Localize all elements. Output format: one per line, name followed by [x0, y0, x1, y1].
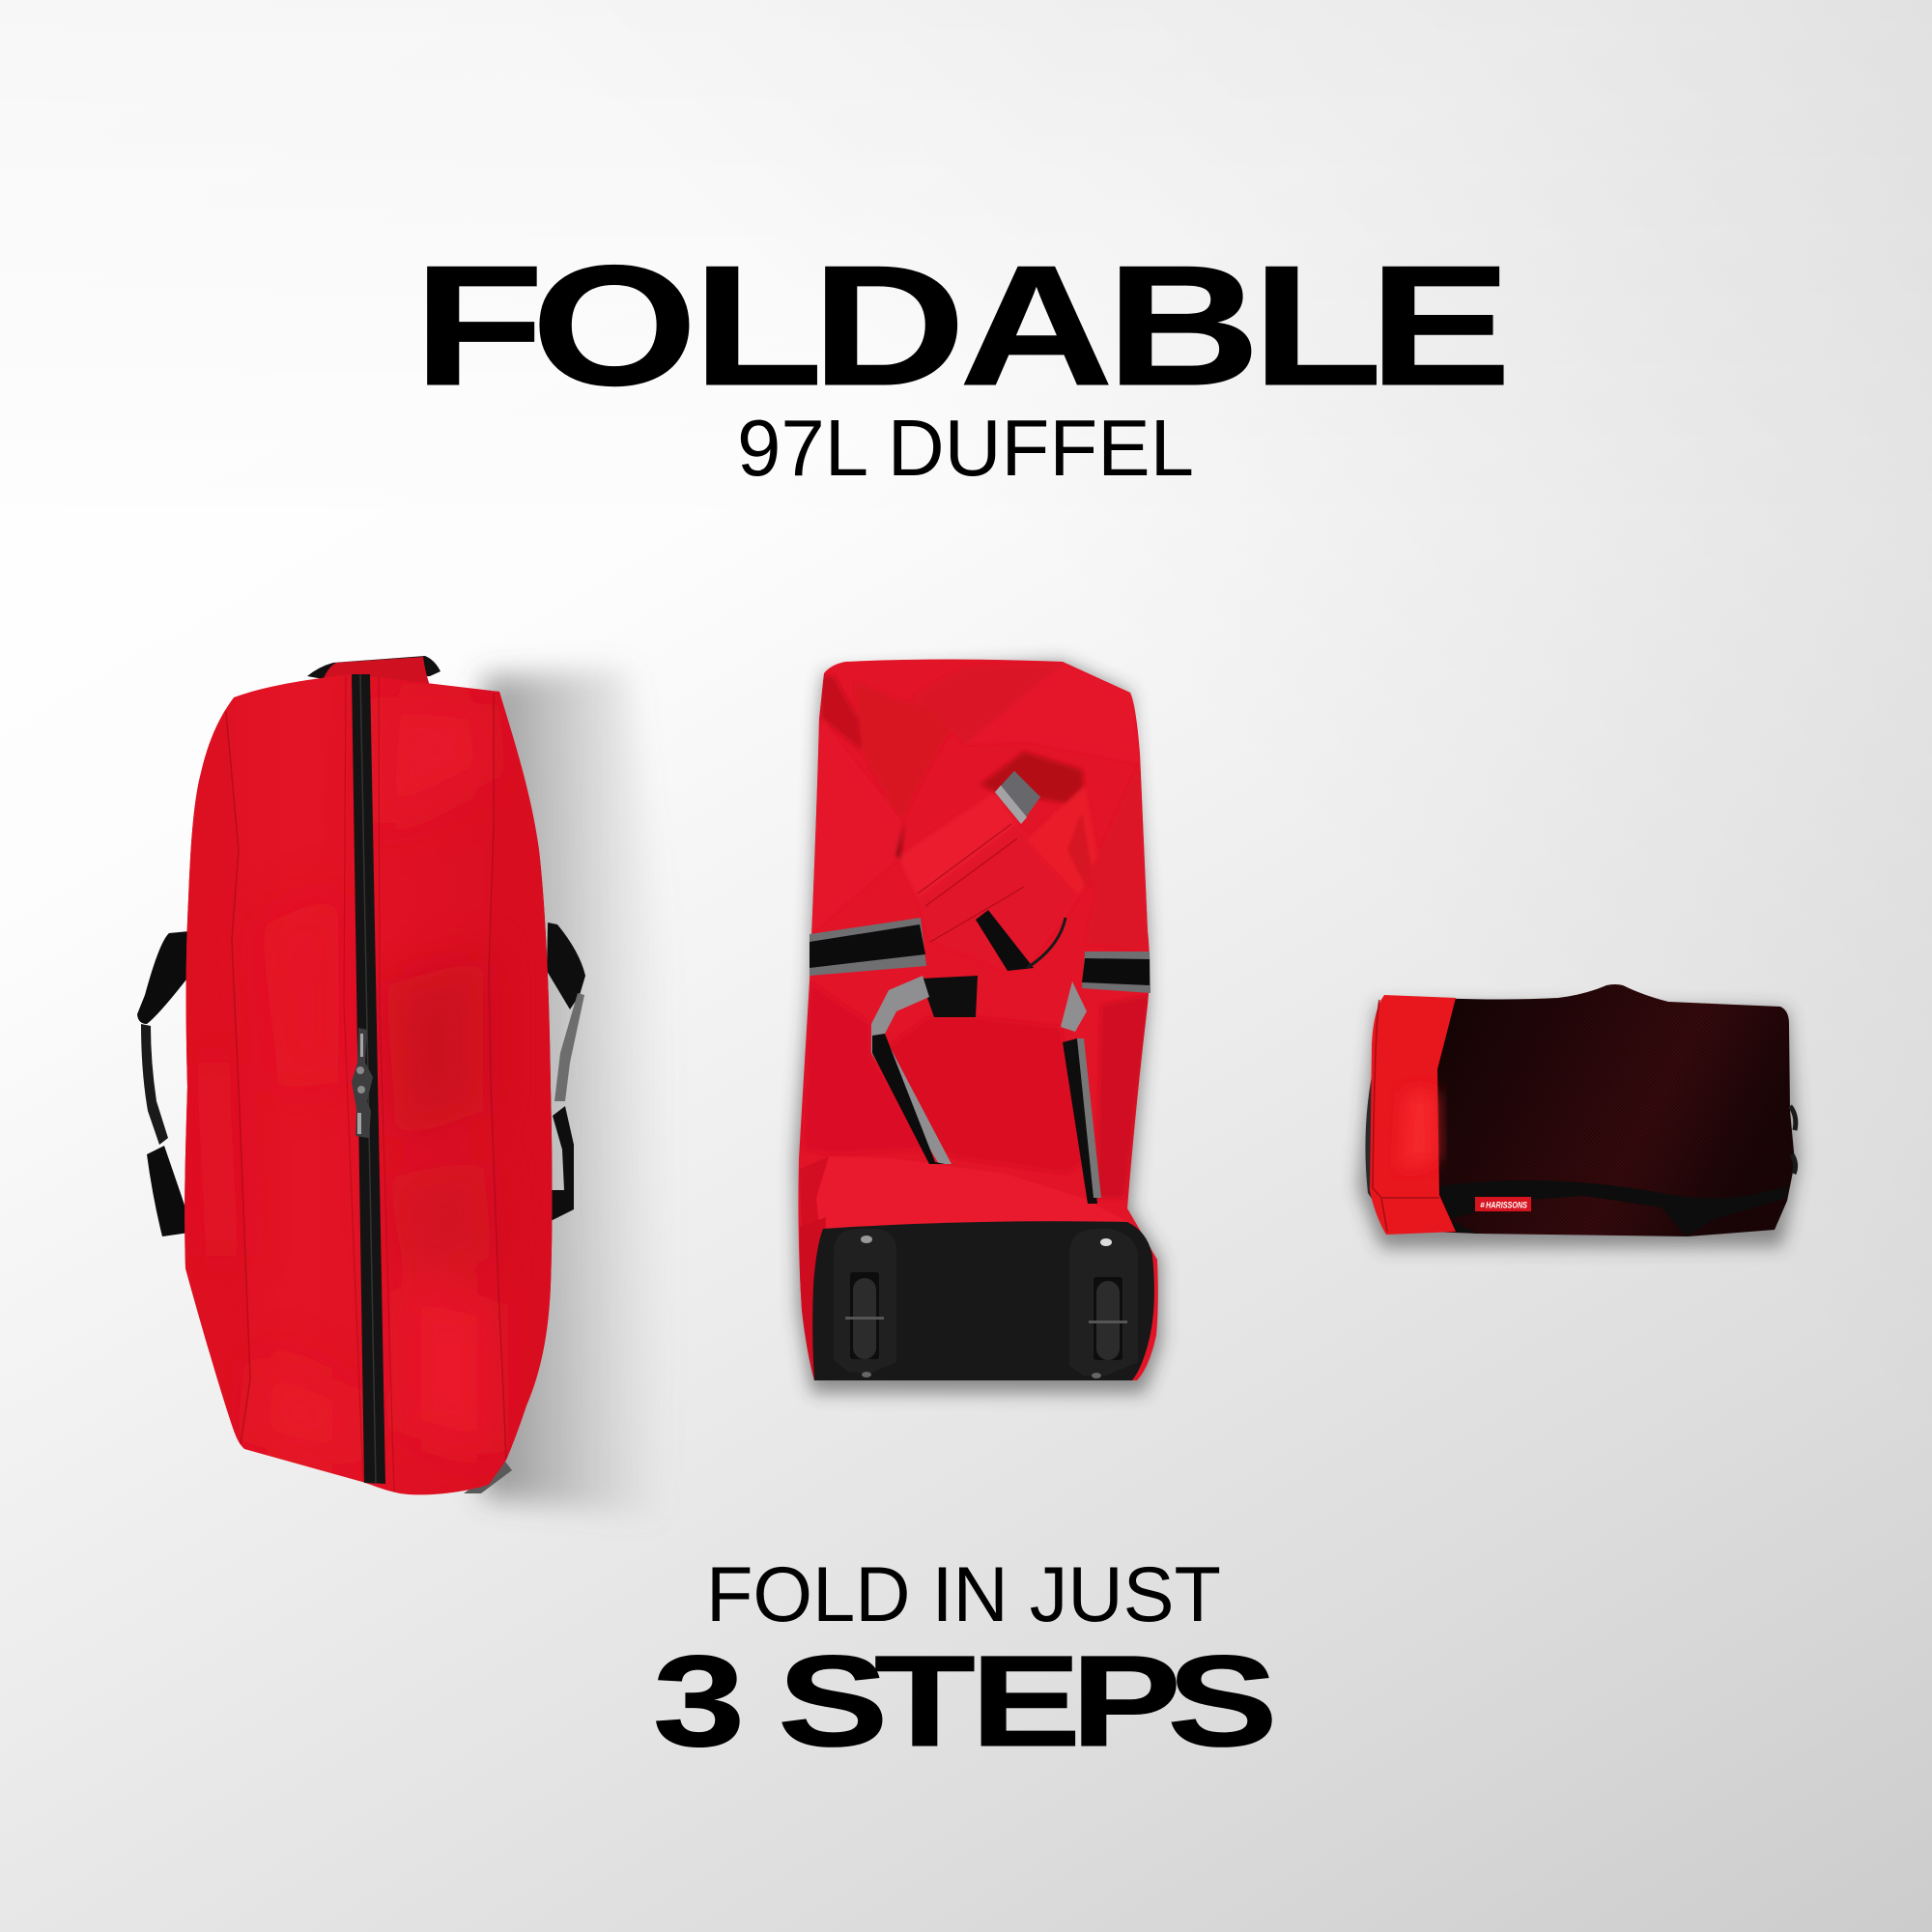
wheel flap	[829, 1157, 840, 1158]
icon: left side handle	[137, 931, 189, 1236]
icon: side loops	[1790, 1106, 1796, 1174]
caption: FOLD IN JUST: FOLD IN JUST	[706, 1551, 1221, 1638]
icon: left wheel assembly	[834, 1229, 896, 1378]
subtitle: 97L DUFFEL: 97L DUFFEL	[737, 403, 1194, 493]
panel: red bag body	[185, 674, 553, 1495]
side panel shading	[185, 709, 242, 1445]
fabric highlights	[247, 684, 493, 1476]
panel: mesh pouch	[1430, 984, 1795, 1236]
panel: red fabric	[792, 657, 1159, 1391]
icon: right side handle	[547, 923, 585, 1221]
icon: right wheel assembly	[1069, 1229, 1138, 1378]
step 1: packed duffel bag	[137, 647, 585, 1507]
step 2: unfolded duffel with wheels	[792, 657, 1159, 1391]
infographic canvas	[137, 265, 1809, 1747]
icon: grey webbing tab	[995, 771, 1040, 824]
icon: left handle strap	[871, 976, 978, 1164]
shadow: rolled bag	[1358, 1005, 1799, 1248]
upper fabric folds	[802, 664, 1150, 1198]
shadow: middle bag	[795, 662, 1161, 1393]
seams	[226, 712, 250, 1444]
lower fabric folds	[802, 981, 927, 1154]
brand label: ⌗ HARISSONS	[1480, 1200, 1528, 1211]
icon: centre handle loop	[976, 910, 1065, 971]
brand label	[1475, 1197, 1531, 1211]
shadow: full duffel cast shadow	[483, 668, 671, 1517]
icon: right compression strap	[1082, 952, 1151, 993]
panel: black wheeled base	[812, 1221, 1154, 1380]
icon: top carry handle	[307, 656, 440, 686]
panel: red end cap	[1370, 995, 1456, 1235]
icon: right handle strap	[1061, 981, 1101, 1204]
icon: bag underside sliver	[464, 1462, 512, 1493]
mesh fold band	[1437, 1180, 1787, 1236]
icon: left compression strap	[810, 918, 926, 976]
step 3: rolled duffel in mesh pouch	[1365, 984, 1796, 1236]
title: FOLDABLE: FOLDABLE	[413, 231, 1512, 421]
icon: main zipper	[352, 674, 385, 1484]
dark back edge	[1365, 1053, 1391, 1227]
caption: 3 STEPS: 3STEPS	[653, 1629, 1278, 1774]
icon: zipper pulls	[352, 1028, 373, 1138]
